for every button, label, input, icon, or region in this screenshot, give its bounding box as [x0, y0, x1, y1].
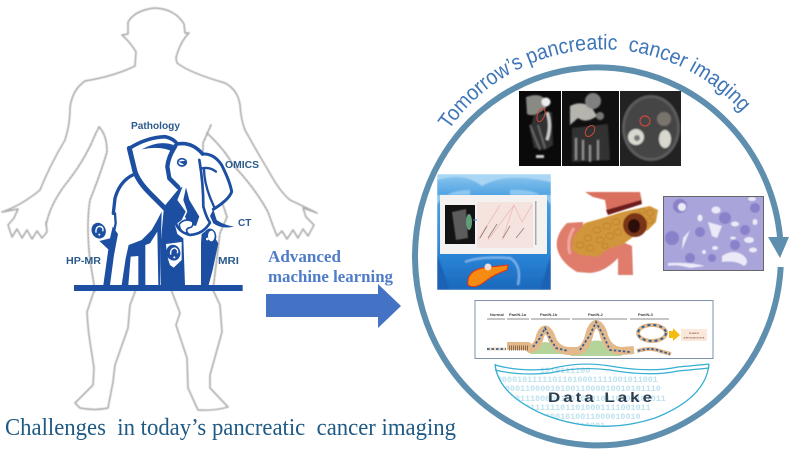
cycle ring with arrowhead	[415, 67, 789, 445]
inset chart	[440, 195, 547, 254]
PanIN progression diagram	[475, 300, 713, 358]
arrow: to tomorrow	[266, 284, 401, 328]
label: HP-MR: HP-MR	[66, 256, 102, 267]
tusk	[210, 209, 234, 227]
elephant in the room	[74, 137, 243, 291]
white elephant body fill	[103, 137, 232, 285]
stage labels: PanIN-1a	[509, 312, 527, 317]
elephant head and ear lines	[113, 137, 232, 235]
ground line	[74, 285, 243, 291]
MRI panel: coronal scan 1	[519, 91, 561, 166]
lake label: Data Lake	[548, 389, 655, 405]
stage labels	[490, 312, 654, 317]
white ear patch	[166, 242, 182, 270]
pancreas body	[572, 206, 658, 257]
pancreas in body	[468, 265, 508, 287]
binary digits	[499, 368, 666, 426]
label: OMICS: OMICS	[225, 160, 259, 171]
label: CT: CT	[238, 218, 251, 229]
illustration: pancreas and duodenum	[557, 192, 658, 275]
tumor	[623, 213, 647, 237]
label: MRI: MRI	[218, 256, 239, 267]
MRI panel: coronal scan 2	[562, 91, 619, 166]
heading: advanced machine learning	[268, 247, 393, 286]
caption: challenges: Challenges in today’s pancreatic cancer imaging	[5, 415, 456, 441]
diagram: body with signal chart	[437, 174, 551, 290]
trunk	[161, 187, 186, 285]
duodenum	[585, 192, 642, 212]
binary digits: 00001010011000010010	[540, 412, 641, 422]
human body outline	[2, 8, 317, 410]
label: Pathology: Pathology	[131, 121, 180, 132]
heading: advanced machine learning: Advanced	[268, 247, 342, 266]
PanIN progression diagram: Invasive	[689, 331, 700, 335]
ear swoosh	[142, 143, 175, 153]
binary digits: 1011100000110101010110100101011	[510, 394, 666, 404]
binary digits: 1010111100	[540, 366, 590, 376]
curved heading: tomorrow: Tomorrow’s pancreatic cancer imaging	[437, 34, 750, 126]
stage labels: PanIN-1b	[540, 312, 558, 317]
stroma	[530, 340, 622, 356]
PanIN progression diagram: adenocarcinoma	[684, 336, 705, 340]
histology slide	[663, 196, 764, 271]
binary digits: 10001100001010011000010010101110	[500, 384, 661, 394]
heading: advanced machine learning: machine learning	[268, 267, 393, 286]
legs	[99, 227, 118, 285]
stage labels: PanIN-3	[638, 312, 654, 317]
eye	[178, 159, 186, 166]
binary digits: 00001011111011010001111001011001	[497, 375, 658, 385]
epithelial fold	[507, 324, 634, 351]
ear icons	[89, 220, 216, 285]
data lake	[495, 364, 709, 431]
MRI panel: axial scan	[620, 91, 681, 166]
binary digits: 0111111011010001111001011	[525, 403, 651, 413]
binary digits: 1010001	[570, 421, 605, 431]
lake outline	[495, 364, 709, 426]
stage labels: Normal	[490, 312, 504, 317]
stage labels: PanIN-2	[588, 312, 604, 317]
